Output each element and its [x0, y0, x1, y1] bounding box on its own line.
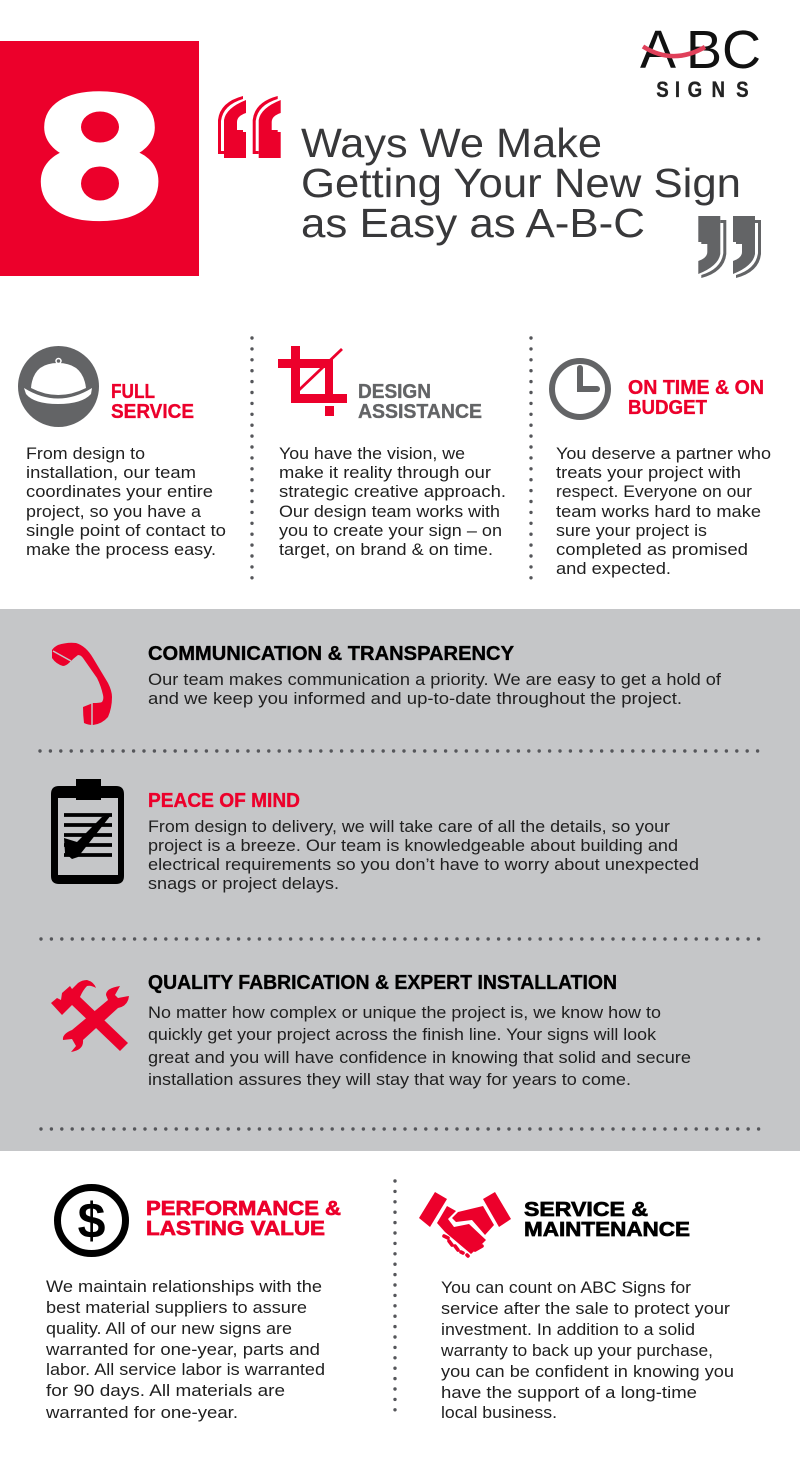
- text: communication and transparency: [148, 670, 721, 708]
- panel: on time and on budget: [552, 361, 771, 578]
- text: performance and lasting value: for 90 days. All materials are: [46, 1381, 285, 1400]
- heading: performance and lasting value: PERFORMANCE &: [146, 1198, 341, 1220]
- text: full service: From design to: [26, 444, 145, 463]
- heading: on time and on budget: BUDGET: [628, 397, 707, 419]
- title: Ways We Make: [301, 120, 602, 166]
- text: performance and lasting value: warranted for one-year, parts and: [45, 1340, 320, 1359]
- text: quality fabrication: [148, 1003, 691, 1089]
- text: performance and lasting value: quality. All of our new signs are: [46, 1319, 292, 1338]
- heading: quality fabrication: QUALITY FABRICATION & EXPERT INSTALLATION: [148, 972, 617, 994]
- text: design assistance: Our design team works with: [279, 502, 500, 521]
- panel: full service: [18, 346, 226, 559]
- text: service and maintenance: service after the sale to protect your: [441, 1299, 730, 1318]
- column dividers: [252, 338, 531, 578]
- heading: design assistance: DESIGN: [358, 381, 431, 403]
- icon: hammer and wrench: [51, 980, 129, 1052]
- text: service and maintenance: have the support of a long-time: [441, 1383, 697, 1402]
- heading: service and maintenance: [524, 1199, 690, 1241]
- heading: design assistance: ASSISTANCE: [358, 401, 482, 423]
- heading: service and maintenance: SERVICE &: [524, 1199, 648, 1221]
- red number block: [0, 41, 199, 276]
- text: design assistance: target, on brand & on time.: [279, 540, 493, 559]
- text: on time and on budget: respect. Everyone on our: [556, 482, 752, 501]
- text: performance and lasting value: We maintain relationships with the: [46, 1277, 322, 1296]
- title: Getting Your New Sign: [301, 160, 741, 206]
- text: quality fabrication: great and you will have confidence in knowing that solid and secure: [148, 1048, 691, 1067]
- text: service and maintenance: investment. In addition to a solid: [441, 1320, 695, 1339]
- text: full service: coordinates your entire: [26, 482, 213, 501]
- text: peace of mind: electrical requirements so you don’t have to worry about unexpected: [148, 855, 699, 874]
- text: full service: [26, 444, 226, 559]
- panel: grey band: [0, 609, 800, 1151]
- text: performance and lasting value: [45, 1277, 325, 1422]
- panel: communication and transparency: [52, 643, 721, 725]
- text: performance and lasting value: warranted for one-year.: [45, 1403, 238, 1422]
- panel: service and maintenance: [419, 1192, 734, 1422]
- text: design assistance: [279, 444, 506, 559]
- text: design assistance: you to create your sign – on: [279, 521, 502, 540]
- heading: service and maintenance: MAINTENANCE: [524, 1219, 690, 1241]
- row dividers: [40, 751, 765, 1129]
- text: service and maintenance: warranty to back up your purchase,: [440, 1341, 713, 1360]
- text: communication and transparency: and we keep you informed and up-to-date throughout the project.: [148, 689, 682, 708]
- title: [301, 120, 741, 246]
- text: full service: project, so you have a: [26, 502, 202, 521]
- text: full service: make the process easy.: [26, 540, 216, 559]
- icon: handshake: [419, 1192, 511, 1256]
- bottom column divider: [393, 1181, 397, 1410]
- text: quality fabrication: No matter how complex or unique the project is, we know how to: [148, 1003, 661, 1022]
- heading: peace of mind: PEACE OF MIND: [148, 790, 300, 812]
- panel: quality fabrication: [51, 972, 691, 1089]
- heading: full service: [111, 381, 194, 423]
- text: on time and on budget: treats your project with: [556, 463, 741, 482]
- icon: clock: [552, 361, 608, 417]
- logo: ABC Signs: SIGNS: [656, 79, 749, 102]
- red number block: 8: [41, 62, 158, 250]
- text: performance and lasting value: best material suppliers to assure: [46, 1298, 307, 1317]
- heading: performance and lasting value: [146, 1198, 341, 1240]
- icon: dollar coin: $: [78, 1193, 106, 1249]
- heading: full service: FULL: [111, 381, 155, 403]
- logo: ABC Signs: ABC: [640, 20, 761, 80]
- text: service and maintenance: you can be confident in knowing you: [441, 1362, 734, 1381]
- text: on time and on budget: [556, 444, 771, 578]
- text: quality fabrication: quickly get your project across the finish line. Your signs will look: [148, 1025, 657, 1044]
- text: on time and on budget: and expected.: [556, 559, 671, 578]
- icon: closing quote mark: [698, 216, 761, 278]
- icon: opening quote mark: [218, 96, 281, 158]
- text: full service: installation, our team: [26, 463, 196, 482]
- title: as Easy as A-B-C: [301, 200, 645, 246]
- text: service and maintenance: local business.: [441, 1403, 557, 1422]
- text: peace of mind: project is a breeze. Our team is knowledgeable about building and: [148, 836, 678, 855]
- panel: peace of mind: [51, 779, 699, 893]
- heading: communication and transparency: COMMUNICATION & TRANSPARENCY: [148, 643, 515, 665]
- text: design assistance: make it reality through our: [279, 463, 491, 482]
- heading: on time and on budget: ON TIME & ON: [628, 377, 764, 399]
- heading: on time and on budget: [628, 377, 764, 419]
- heading: performance and lasting value: LASTING VALUE: [146, 1218, 325, 1240]
- icon: dollar coin: [58, 1188, 126, 1254]
- icon: telephone: [52, 643, 112, 725]
- panel: performance and lasting value: [45, 1188, 341, 1422]
- text: design assistance: You have the vision, we: [279, 444, 465, 463]
- heading: design assistance: [358, 381, 482, 423]
- heading: full service: SERVICE: [111, 401, 194, 423]
- icon: clipboard: [51, 779, 124, 884]
- text: on time and on budget: You deserve a partner who: [556, 444, 771, 463]
- text: peace of mind: snags or project delays.: [148, 874, 339, 893]
- text: service and maintenance: You can count on ABC Signs for: [441, 1278, 691, 1297]
- text: peace of mind: From design to delivery, we will take care of all the details, so your: [148, 817, 670, 836]
- text: on time and on budget: sure your project is: [556, 521, 707, 540]
- text: full service: single point of contact to: [26, 521, 226, 540]
- text: on time and on budget: completed as promised: [556, 540, 748, 559]
- text: quality fabrication: installation assures they will stay that way for years to come.: [148, 1070, 631, 1089]
- icon: cloche: [18, 346, 99, 427]
- text: performance and lasting value: labor. All service labor is warranted: [46, 1360, 325, 1379]
- text: peace of mind: [148, 817, 699, 893]
- panel: design assistance: [278, 346, 506, 559]
- text: service and maintenance: [440, 1278, 734, 1422]
- text: design assistance: strategic creative approach.: [279, 482, 506, 501]
- icon: crop: [278, 346, 347, 416]
- text: communication and transparency: Our team makes communication a priority. We are easy to get a hold of: [148, 670, 721, 689]
- text: on time and on budget: team works hard to make: [556, 502, 761, 521]
